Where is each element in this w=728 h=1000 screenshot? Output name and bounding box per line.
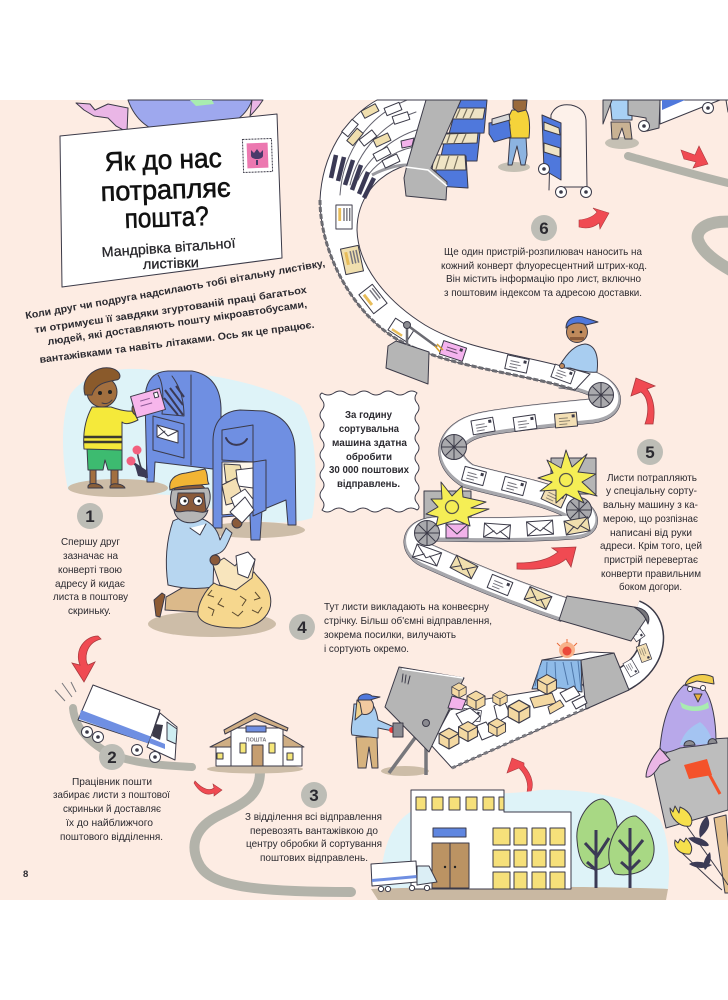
stamp callout: відправлень. [337, 479, 400, 490]
number circle 2: 2 [107, 748, 117, 767]
ground: sorting centre [371, 887, 668, 900]
text: step 3: перевозять вантажівкою до [250, 826, 378, 837]
worker at conveyor [560, 316, 598, 372]
sack [198, 552, 271, 628]
number circle 2 [99, 744, 125, 770]
text: step 5: боком догори. [619, 581, 682, 593]
arrow: step 6 to next [579, 208, 609, 229]
camera flash: upper [538, 450, 597, 503]
subtitle [101, 235, 236, 272]
man with sack [154, 469, 271, 628]
arrow: step 5 to 6 [631, 378, 655, 424]
subtitle: листівки [143, 254, 199, 272]
boy posting letter [84, 368, 165, 488]
subtitle: Мандрівка вітальної [101, 235, 236, 260]
text: step 6: Він містить інформацію про лист, включно [446, 273, 641, 285]
mail cart [538, 105, 592, 198]
text: step 5: мерою, що розпізнає [603, 514, 698, 525]
road: post office to sorting centre [194, 772, 351, 892]
tunnel before sorter [559, 596, 652, 680]
text: step 2 [53, 777, 170, 843]
text: step 1: скриньку. [68, 606, 111, 617]
mailbox: right with letters [213, 410, 296, 540]
conveyor belt: serpentine [416, 374, 608, 610]
post office [207, 713, 304, 774]
ground patches: step 1 [68, 479, 305, 637]
curtain and sorter tunnel [532, 652, 629, 709]
stamp callout: За годину [345, 410, 392, 421]
text: step 6: з поштовим індексом та адресою доставки. [444, 288, 642, 299]
text: step 2: Працівник пошти [72, 777, 152, 788]
text: step 5: конверти правильним [601, 569, 701, 580]
arrow: step 4 to 5 [517, 547, 576, 569]
letters and parcels on lower conveyor [439, 675, 587, 749]
mailbox: bottom right [654, 738, 728, 828]
siren [557, 639, 577, 658]
number circle 3 [301, 782, 327, 808]
flowers: by mailbox [126, 446, 148, 478]
text: step 6: Ще один пристрій-розпилювач наносить на [444, 247, 642, 258]
text: step 5: написані від руки [610, 528, 692, 539]
text: step 5: адреси. Крім того, цей [600, 541, 702, 552]
text: step 5: вальну машину з ка- [603, 500, 698, 511]
intro text: вантажівками та навіть літаками. Ось як це працює. [39, 320, 315, 366]
heading [100, 143, 231, 234]
wooden post [714, 815, 728, 893]
bird: bottom right [646, 675, 717, 777]
envelopes on conveyor [412, 412, 590, 609]
number circle 1: 1 [85, 507, 95, 526]
arrow: step 2 to 3 [194, 781, 222, 796]
text: step 4: зокрема посилки, вилучають [324, 630, 456, 641]
text: step 1 [53, 537, 129, 617]
mail truck [78, 685, 177, 762]
text: step 5: Листи потрапляють [607, 473, 697, 484]
stamp callout: обробити [346, 451, 392, 463]
small truck [371, 861, 437, 892]
camera flash: lower [426, 482, 489, 526]
stamp callout: машина здатна [332, 438, 407, 449]
text: step 1: зазначає на [63, 551, 118, 562]
text: step 3: поштових відправлень. [260, 853, 368, 864]
text: step 2: їх до найближчого [65, 817, 153, 829]
page background [0, 100, 728, 900]
title card [60, 114, 282, 287]
intro text: ти отримуєш її завдяки згуртованій праці багатьох [34, 284, 308, 336]
text: step 2: скриньки й доставляє [63, 804, 161, 815]
flowers: by mailbox bottom right [670, 806, 728, 890]
number circle 5 [637, 439, 663, 465]
letter in hand [230, 497, 254, 523]
number circle 4: 4 [297, 618, 307, 637]
text: step 1: Спершу друг [61, 537, 120, 548]
page number: 8 [23, 869, 28, 880]
number circle 1 [77, 503, 103, 529]
text: step 1: адресу й кидає [55, 579, 125, 590]
text: step 1: листа в поштову [53, 592, 129, 603]
bird: top left holding card [76, 100, 263, 134]
text: step 2: забирає листи з поштової [53, 789, 170, 801]
worker at top right [603, 100, 660, 149]
text: step 2: поштового відділення. [60, 832, 163, 843]
funnel machine [385, 667, 464, 775]
trees [577, 799, 654, 888]
worker at funnel [351, 694, 429, 776]
text: step 3: З відділення всі відправлення [245, 812, 382, 823]
stamp callout: 30 000 поштових [329, 465, 409, 476]
blue sorting racks [432, 100, 487, 188]
motion lines: truck [55, 682, 76, 701]
text: step 5: пристрій перевертає [604, 555, 698, 566]
post office: ПОШТА [246, 738, 266, 744]
light blue backdrop: mailboxes [63, 369, 316, 523]
heading: потрапляє [100, 172, 231, 207]
sorting machine [404, 100, 461, 200]
number circle 4 [289, 614, 315, 640]
text: step 5: у спеціальну сорту- [606, 486, 697, 497]
arrow: top right [681, 146, 708, 168]
text: step 5 [600, 473, 702, 593]
truck at top right [638, 100, 728, 132]
worker with tray [489, 100, 530, 172]
road: top right [628, 156, 728, 272]
sorting centre building [411, 790, 571, 889]
stamp [242, 138, 273, 172]
text: step 4 [324, 602, 492, 655]
text: step 3: центру обробки й сортування [246, 838, 382, 850]
road: truck to post office [73, 708, 192, 767]
text: step 3 [245, 812, 382, 864]
text: step 4: Тут листи викладають на конвеєрну [324, 602, 490, 613]
number circle 6: 6 [539, 219, 549, 238]
number circle 5: 5 [645, 443, 655, 462]
stamp callout [320, 391, 419, 512]
heading: пошта? [124, 201, 209, 234]
arrow: step 1 to 2 [72, 636, 101, 682]
intro text [24, 257, 326, 366]
text: step 6: кожний конверт флуоресцентний штрих-код. [441, 260, 647, 272]
number circle 6 [531, 215, 557, 241]
arrow: step 3 to 4 [507, 758, 532, 796]
text: step 6 [441, 247, 647, 299]
mailbox: left [145, 371, 221, 482]
text: step 1: конверті твою [58, 565, 122, 576]
text: step 4: стрічку. Більш об'ємні відправлення, [324, 615, 492, 627]
number circle 3: 3 [309, 786, 319, 805]
intro text: Коли друг чи подруга надсилають тобі вітальну листівку, [24, 257, 326, 322]
stamp callout: сортувальна [339, 424, 399, 435]
lower conveyor [431, 684, 597, 768]
camera boxes behind conveyor [424, 458, 596, 521]
conveyor belt: upper wide curve [320, 100, 590, 390]
intro text: людей, які доставляють пошту мікроавтобусами, [47, 298, 308, 348]
wheels: conveyor [414, 382, 614, 546]
envelope in hand [131, 388, 165, 418]
letters in rows [342, 102, 414, 168]
sprayer device [386, 322, 443, 384]
text: step 4: і сортують окремо. [324, 644, 409, 655]
heading: Як до нас [104, 143, 222, 177]
light blue backdrop: sorting centre [380, 790, 669, 890]
